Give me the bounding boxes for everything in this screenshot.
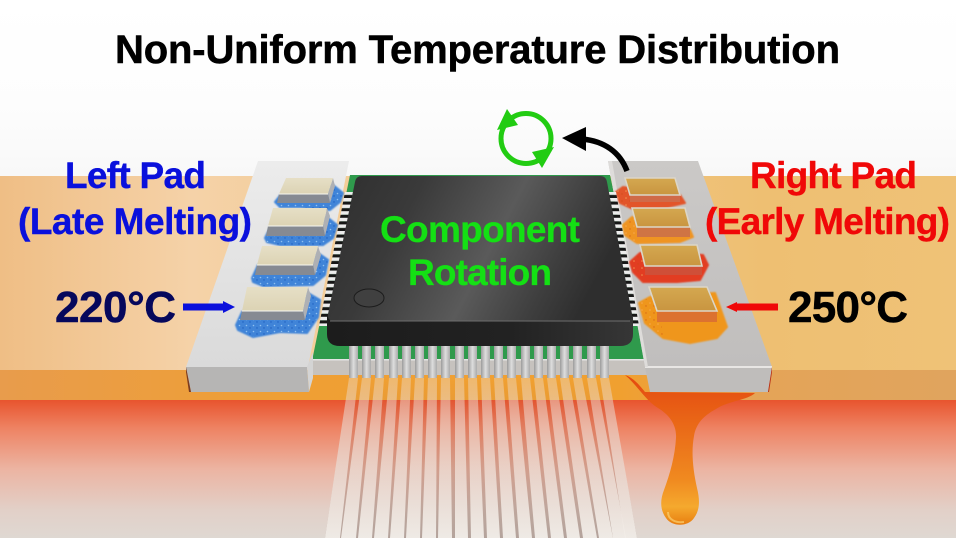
left temperature: 220°C [55,283,176,332]
arrow: blue [183,301,235,313]
label: left pad: (Late Melting) [18,201,252,242]
left pad [186,161,349,392]
pin-1 dot [354,289,384,307]
blue solder puddles [236,185,343,337]
component 1 right [625,178,680,202]
right pad [608,161,772,392]
solder drip [625,375,755,525]
bottom leads [349,342,609,378]
component 2 right [632,208,690,237]
arrow: black curved [562,127,627,171]
label: right pad [705,155,950,242]
side pins [319,192,639,326]
component 3 left [255,246,321,275]
substrate: green PCB strip [312,175,650,375]
component 3 right [640,245,702,275]
fan-out traces [325,378,637,538]
right temperature: 250°C [788,283,908,332]
label: component rotation: Rotation [408,252,552,293]
title: Non-Uniform Temperature Distribution [115,28,840,72]
component 2 left [266,208,330,236]
label: component rotation: Component [380,209,580,250]
chip [327,176,633,346]
arrow: red [726,302,778,312]
component 1 left [277,178,335,203]
label: right pad: Right Pad [750,155,917,196]
label: right pad: (Early Melting) [705,201,950,242]
icon: green rotation arrows [497,109,554,168]
component 4 right [649,287,717,322]
label: left pad: Left Pad [65,155,206,196]
label: component rotation [380,209,580,293]
solder puddles right [616,187,727,343]
component 4 left [240,287,311,320]
label: left pad [18,155,252,242]
